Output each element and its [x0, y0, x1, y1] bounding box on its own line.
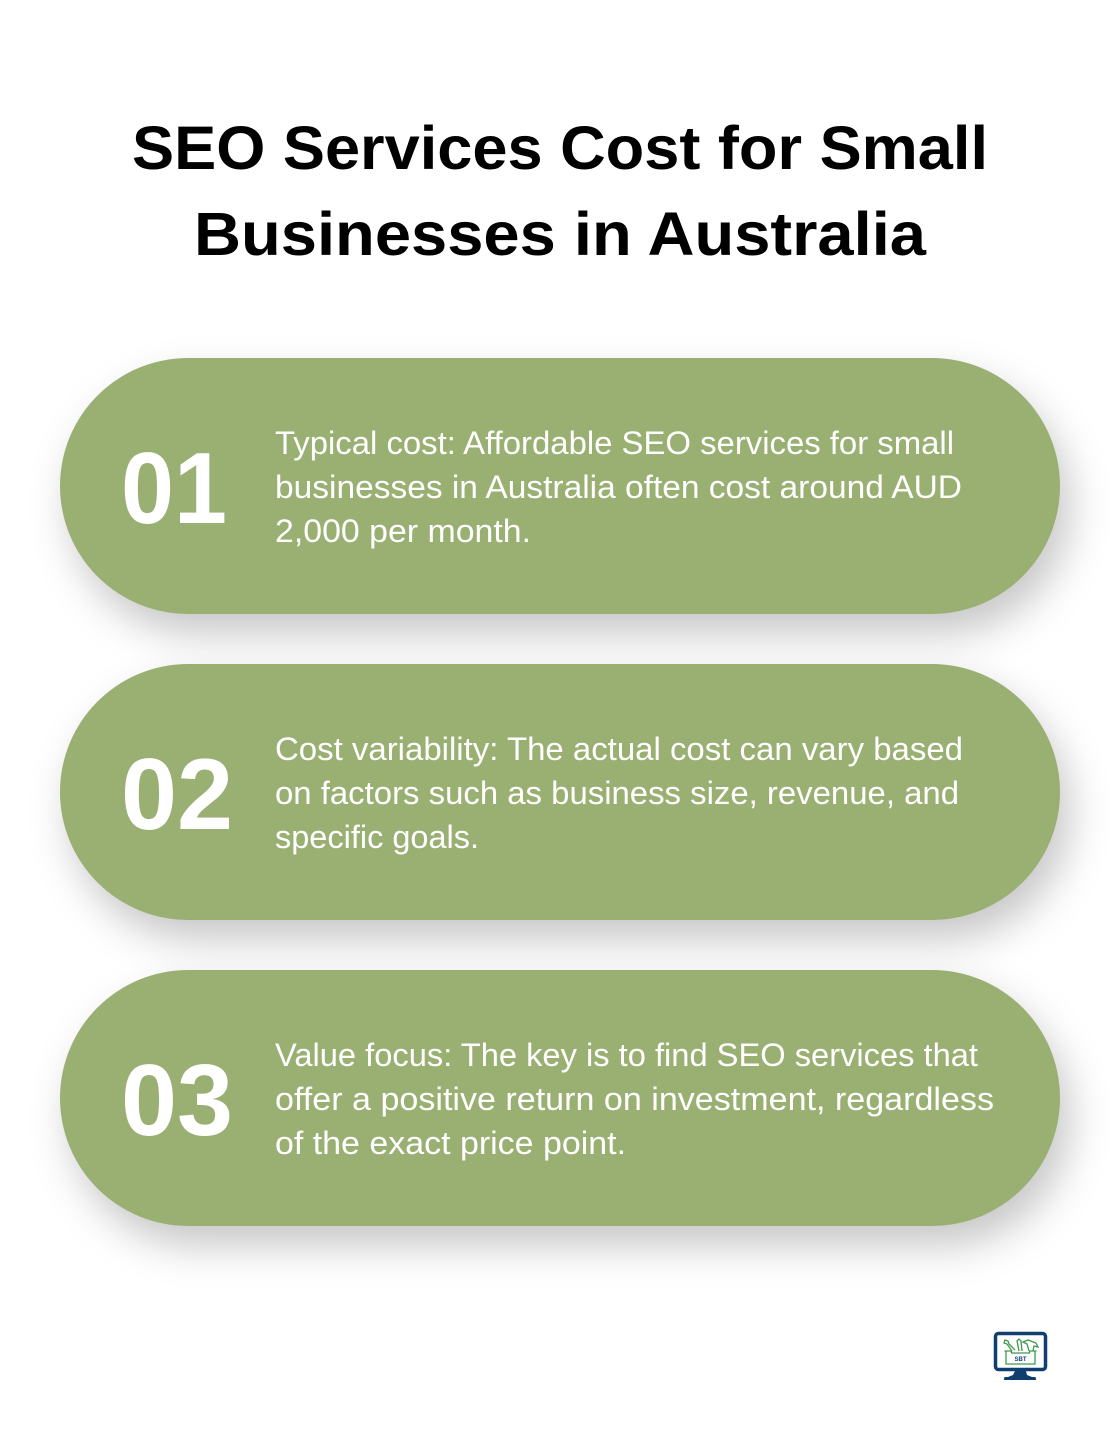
text block 1: businesses in Australia often cost around AUD	[275, 469, 962, 505]
text block 1	[275, 425, 962, 549]
text block 2: Cost variability: The actual cost can vary based	[275, 731, 963, 767]
text block 1: 2,000 per month.	[275, 513, 531, 549]
text block 3: offer a positive return on investment, regardless	[275, 1081, 994, 1117]
text block 2	[275, 731, 963, 855]
title	[132, 114, 988, 268]
number 02: 02	[121, 739, 233, 851]
text block 1: Typical cost: Affordable SEO services for small	[275, 425, 954, 461]
icon: SBT toolbox monitor logo: SBT	[1014, 1357, 1027, 1363]
title: SEO Services Cost for Small	[132, 114, 988, 182]
number 01: 01	[121, 433, 227, 545]
pill background 3	[60, 970, 1060, 1226]
text block 3: of the exact price point.	[275, 1125, 626, 1161]
text block 2: specific goals.	[275, 819, 479, 855]
panel: typical cost	[60, 358, 1060, 614]
text block 2: on factors such as business size, revenue, and	[275, 775, 959, 811]
panel: value focus	[60, 970, 1060, 1226]
pill background 2	[60, 664, 1060, 920]
panel: cost variability	[60, 664, 1060, 920]
text block 3: Value focus: The key is to find SEO services that	[275, 1037, 978, 1073]
title: Businesses in Australia	[194, 200, 927, 268]
text block 3	[275, 1037, 994, 1161]
number 03: 03	[121, 1045, 233, 1157]
icon: SBT toolbox monitor logo	[996, 1334, 1046, 1380]
pill background 1	[60, 358, 1060, 614]
